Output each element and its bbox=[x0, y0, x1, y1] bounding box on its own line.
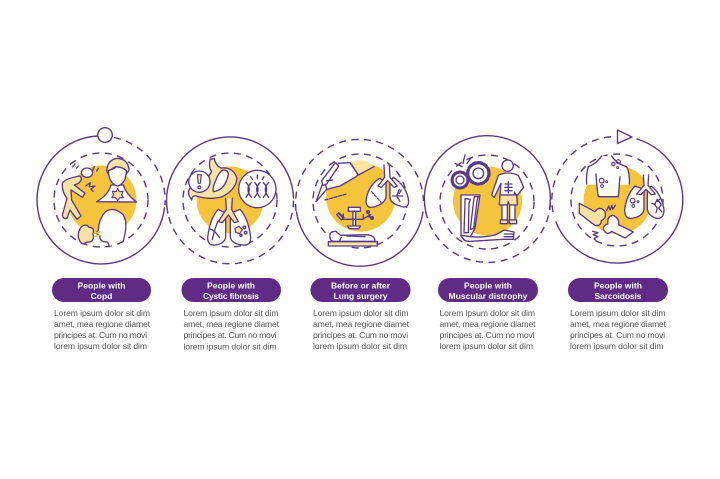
icon: torso with lesions bbox=[587, 156, 629, 197]
label: People with Muscular distrophy: Muscular distrophy bbox=[448, 291, 528, 301]
text block: Sarcoidosis bbox=[570, 308, 667, 351]
outer ring: lung surgery bbox=[296, 139, 424, 266]
text block: Copd: Lorem ipsum dolor sit dim bbox=[54, 308, 150, 318]
icon: hand with scalpel bbox=[316, 163, 374, 202]
text block: Sarcoidosis: lorem ipsum dolor sit dim bbox=[570, 341, 664, 351]
label: People with Cystic fibrosis: People with bbox=[207, 281, 255, 291]
outer ring: sarcoidosis bbox=[552, 136, 683, 263]
text block: Lung surgery: lorem ipsum dolor sit dim bbox=[313, 341, 407, 351]
text block: Cystic fibrosis: Lorem ipsum dolor sit dim bbox=[184, 308, 278, 318]
icon: thigh bone bbox=[579, 203, 605, 226]
label: People with Cystic fibrosis: Cystic fibrosis bbox=[203, 291, 259, 301]
icon: stomach bbox=[188, 159, 237, 200]
text block: Cystic fibrosis: amet, mea regione diamet bbox=[184, 319, 280, 329]
panel: sarcoidosis circle bbox=[552, 130, 683, 263]
inner dashed ring: lung surgery bbox=[313, 154, 407, 248]
label: People with Muscular distrophy bbox=[438, 278, 538, 302]
label: People with Sarcoidosis: People with bbox=[594, 281, 642, 291]
yellow disc: cystic fibrosis bbox=[196, 166, 264, 234]
icon: muscular dystrophy bbox=[452, 155, 524, 241]
icon: person exhaling bbox=[78, 209, 126, 247]
label: People with Copd: Copd bbox=[91, 291, 112, 301]
label: People with Sarcoidosis: Sarcoidosis bbox=[594, 291, 642, 301]
text block: Muscular distrophy bbox=[440, 308, 536, 351]
text block: Cystic fibrosis: principes at. Cum no movi bbox=[184, 330, 277, 340]
icon: light highlight on disc bbox=[352, 160, 374, 175]
panel: COPD circle bbox=[37, 128, 165, 264]
icon: man with throat symptom bbox=[97, 158, 137, 202]
outer ring: muscular dystrophy bbox=[424, 136, 550, 262]
inner dashed ring: muscular dystrophy bbox=[440, 155, 534, 249]
icon: patient on table bbox=[328, 231, 377, 246]
text block: Muscular distrophy: principes at. Cum no movi bbox=[440, 330, 535, 340]
inner dashed ring: cystic fibrosis bbox=[183, 153, 277, 247]
icon: shin bone bbox=[603, 215, 633, 238]
label: People with Copd bbox=[52, 278, 151, 302]
icon: DNA badge bbox=[239, 170, 276, 208]
icon: surgical instruments bbox=[337, 207, 373, 229]
timeline start marker bbox=[98, 128, 112, 142]
text block: Lung surgery bbox=[313, 308, 410, 351]
label: People with Copd: People with bbox=[78, 281, 126, 291]
icon: lungs bbox=[366, 165, 409, 207]
icon: sarcoidosis bbox=[579, 156, 664, 240]
panel: lung surgery circle bbox=[296, 139, 424, 266]
icon: alert badge bbox=[189, 171, 210, 192]
icon: lung surgery bbox=[316, 160, 409, 246]
label: Before or after Lung surgery: Before or after bbox=[331, 281, 391, 291]
icon: lungs bbox=[625, 175, 664, 218]
text block: Sarcoidosis: principes at. Cum no movi bbox=[570, 330, 665, 340]
icon: coughing person bbox=[62, 164, 98, 219]
text block: Sarcoidosis: Lorem ipsum dolor sit dim bbox=[570, 308, 666, 318]
icon: cystic fibrosis organs bbox=[188, 159, 276, 245]
icon: COPD symptoms bbox=[62, 158, 137, 247]
outer ring: COPD bbox=[37, 136, 165, 264]
icon: spark lines bbox=[455, 155, 471, 167]
text block: Copd: principes at. Cum no movi bbox=[54, 330, 147, 340]
text block: Cystic fibrosis: lorem ipsum dolor sit dim bbox=[184, 342, 276, 352]
yellow disc: muscular dystrophy bbox=[453, 166, 522, 236]
text block: Copd: lorem ipsum dolor sit dim bbox=[54, 341, 147, 351]
panel: muscular dystrophy circle bbox=[424, 136, 550, 262]
text block: Lung surgery: principes at. Cum no movi bbox=[313, 330, 408, 340]
text block: Muscular distrophy: lorem ipsum dolor sit dim bbox=[440, 341, 533, 351]
icon: weak arm bbox=[461, 230, 514, 241]
text block: Copd bbox=[54, 308, 151, 351]
text block: Muscular distrophy: Lorem ipsum dolor sit dim bbox=[440, 308, 535, 318]
icon: stomach inner bbox=[213, 170, 228, 192]
inner dashed ring: sarcoidosis bbox=[571, 154, 663, 246]
icon: leg bones bbox=[461, 195, 480, 237]
inner dashed ring: COPD bbox=[54, 153, 148, 247]
text block: Sarcoidosis: amet, mea regione diamet bbox=[570, 319, 667, 329]
outer ring: cystic fibrosis bbox=[167, 137, 294, 264]
panel: cystic fibrosis circle bbox=[167, 137, 294, 264]
text block: Muscular distrophy: amet, mea regione diamet bbox=[440, 319, 536, 329]
text block: Lung surgery: Lorem ipsum dolor sit dim bbox=[313, 308, 408, 318]
label: People with Sarcoidosis bbox=[568, 278, 668, 302]
icon: man with weak muscles bbox=[492, 160, 524, 224]
timeline end marker bbox=[618, 130, 632, 144]
icon: hand fingers bbox=[504, 234, 513, 237]
icon: lungs bbox=[208, 198, 251, 245]
text block: Lung surgery: amet, mea regione diamet bbox=[313, 319, 410, 329]
label: Before or after Lung surgery bbox=[310, 278, 410, 302]
yellow disc: COPD bbox=[68, 166, 136, 234]
text block: Copd: amet, mea regione diamet bbox=[54, 319, 151, 329]
label: People with Muscular distrophy: People with bbox=[464, 281, 512, 291]
icon: pain marks bbox=[593, 205, 615, 240]
yellow disc: lung surgery bbox=[326, 162, 395, 232]
label: Before or after Lung surgery: Lung surgery bbox=[334, 291, 388, 301]
text block: Cystic fibrosis bbox=[184, 308, 280, 352]
icon: small gear bbox=[452, 172, 468, 188]
icon: large gear bbox=[468, 163, 489, 184]
label: People with Cystic fibrosis bbox=[182, 278, 281, 302]
yellow disc: sarcoidosis bbox=[584, 166, 652, 234]
